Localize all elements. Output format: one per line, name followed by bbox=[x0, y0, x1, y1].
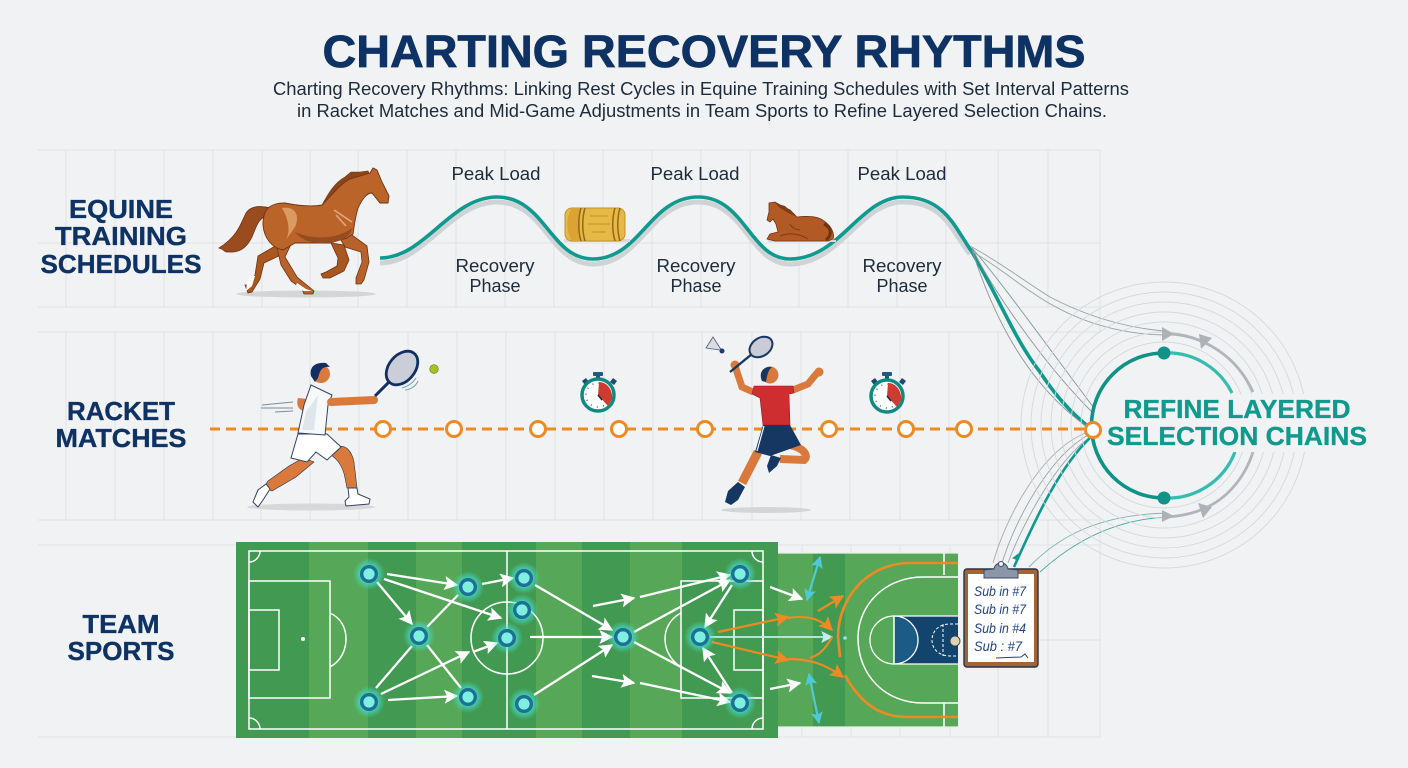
wave labels: Phase bbox=[469, 276, 521, 296]
icon: substitution clipboard: Sub in #4 bbox=[974, 621, 1026, 636]
subtitle bbox=[273, 79, 1129, 121]
row heading: team sports: SPORTS bbox=[68, 636, 174, 666]
panel: refine layered selection chains bbox=[1021, 282, 1370, 568]
panel: soccer pitch bbox=[236, 542, 843, 738]
icon: stopwatch 2 bbox=[871, 372, 906, 412]
row heading: equine training schedules: SCHEDULES bbox=[40, 249, 202, 279]
wave labels bbox=[452, 164, 946, 296]
wave labels: Peak Load bbox=[452, 164, 540, 184]
icon: badminton player bbox=[706, 332, 824, 513]
player nodes bbox=[353, 558, 756, 720]
tactical arrows bbox=[376, 574, 802, 702]
wave labels: Phase bbox=[876, 276, 928, 296]
wave labels: Peak Load bbox=[858, 164, 946, 184]
wave labels: Peak Load bbox=[650, 164, 740, 184]
wave labels: Phase bbox=[670, 276, 722, 296]
icon: substitution clipboard: Sub in #7 bbox=[974, 584, 1026, 599]
row heading: team sports bbox=[68, 609, 174, 666]
title: CHARTING RECOVERY RHYTHMS bbox=[322, 26, 1086, 77]
row heading: racket matches: RACKET bbox=[67, 396, 175, 426]
converging selection lines bbox=[970, 246, 1166, 572]
icon: tennis player bbox=[247, 345, 438, 510]
panel: basketball court bbox=[778, 553, 960, 727]
icon: stopwatch 1 bbox=[582, 372, 617, 411]
wave labels: Recovery bbox=[656, 256, 736, 276]
row heading: equine training schedules: TRAINING bbox=[55, 221, 187, 251]
wave labels: Recovery bbox=[862, 256, 942, 276]
subtitle: in Racket Matches and Mid-Game Adjustments in Team Sports to Refine Layered Selection Chains. bbox=[297, 101, 1107, 121]
row heading: team sports: TEAM bbox=[82, 609, 160, 639]
orange play arrows bbox=[712, 596, 843, 677]
subtitle: Charting Recovery Rhythms: Linking Rest Cycles in Equine Training Schedules with Set Interval Patterns bbox=[273, 79, 1129, 99]
row heading: equine training schedules: EQUINE bbox=[69, 194, 173, 224]
wave labels: Recovery bbox=[456, 256, 534, 276]
row heading: equine training schedules bbox=[40, 194, 202, 279]
row heading: racket matches bbox=[56, 396, 186, 453]
icon: resting foal bbox=[767, 202, 836, 241]
icon: galloping horse bbox=[219, 168, 389, 298]
row heading: racket matches: MATCHES bbox=[56, 423, 186, 453]
chart: load wave shadow and line bbox=[380, 197, 1090, 428]
icon: substitution clipboard bbox=[964, 562, 1038, 667]
icon: hay bale bbox=[564, 208, 630, 242]
panel: refine layered selection chains: SELECTION CHAINS bbox=[1107, 421, 1367, 451]
timeline: set intervals bbox=[210, 422, 1100, 438]
icon: substitution clipboard: Sub in #7 bbox=[974, 602, 1026, 617]
panel: refine layered selection chains: REFINE LAYERED bbox=[1124, 394, 1350, 424]
icon: substitution clipboard: Sub : #7 bbox=[974, 639, 1022, 654]
cyan movement arrows bbox=[807, 557, 820, 723]
